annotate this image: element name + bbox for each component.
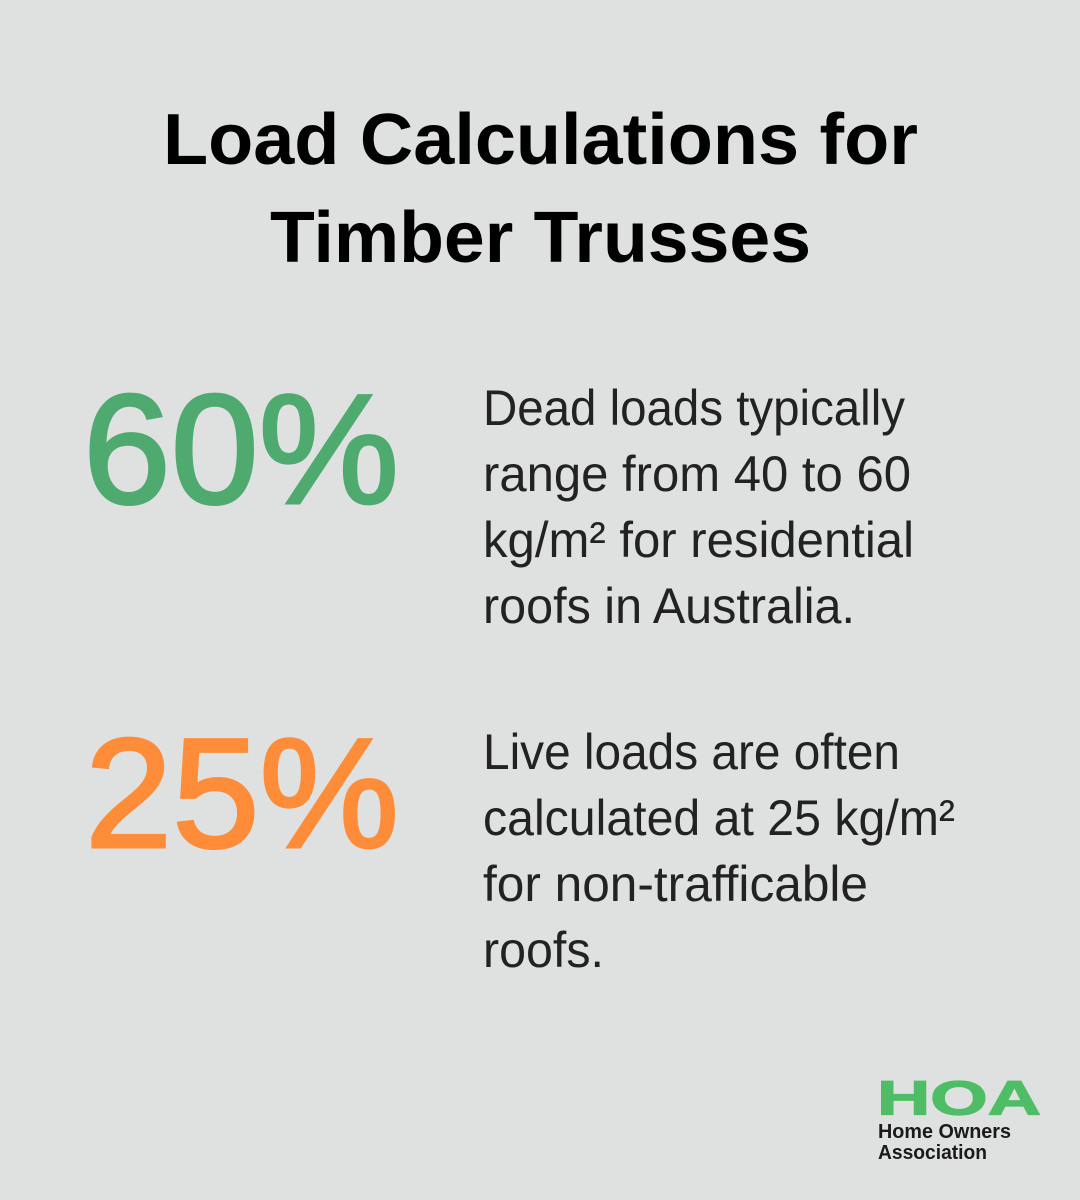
text block: live loads description: [483, 724, 955, 978]
text block: live loads description: Live loads are often: [483, 724, 900, 780]
stat number: 60%: 60%: [83, 363, 399, 537]
text block: live loads description: calculated at 25 kg/m²: [483, 790, 955, 846]
title: [163, 100, 918, 278]
logo: Home Owners Association: HOA: [877, 1072, 1041, 1126]
stat: dead loads: [83, 363, 914, 634]
text block: live loads description: roofs.: [483, 922, 604, 978]
logo: Home Owners Association: Home Owners: [878, 1121, 1011, 1143]
text block: dead loads description: kg/m² for residential: [483, 512, 914, 568]
logo: Home Owners Association: Association: [878, 1142, 987, 1164]
text block: dead loads description: Dead loads typically: [483, 380, 905, 436]
stat: live loads: [85, 707, 955, 978]
title: Timber Trusses: [270, 198, 811, 278]
stat number: 25%: 25%: [85, 707, 399, 881]
text block: dead loads description: [483, 380, 914, 634]
text block: dead loads description: range from 40 to 60: [483, 446, 911, 502]
title: Load Calculations for: [163, 100, 918, 180]
logo: Home Owners Association: [877, 1072, 1041, 1164]
text block: dead loads description: roofs in Australia.: [483, 578, 855, 634]
text block: live loads description: for non-trafficable: [483, 856, 868, 912]
